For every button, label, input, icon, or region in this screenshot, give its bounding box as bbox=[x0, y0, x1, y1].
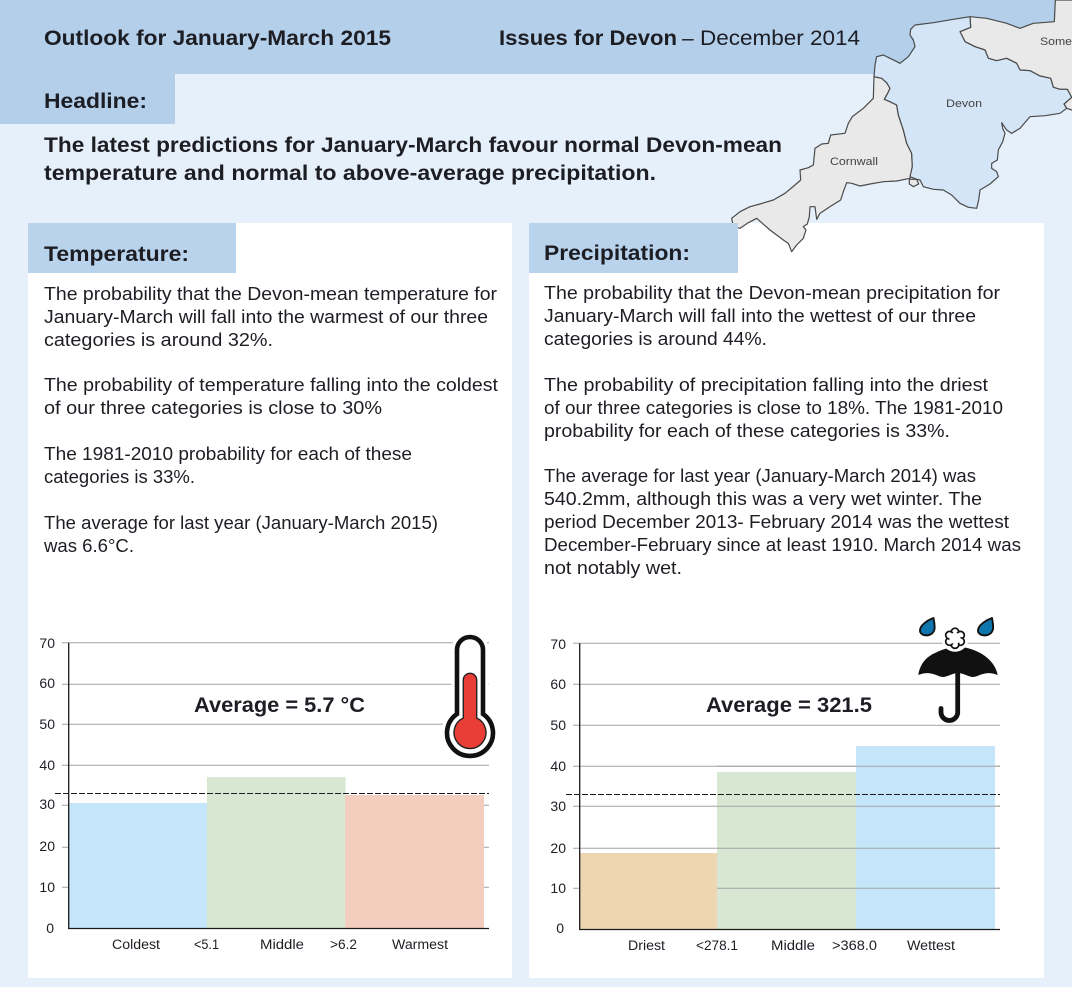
bar: warmest bbox=[345, 795, 484, 928]
temperature text block: The average for last year (January-March 2015) bbox=[44, 513, 438, 533]
title: issues for Devon: – bbox=[682, 27, 694, 50]
title: issues for Devon: December 2014 bbox=[700, 27, 860, 50]
temperature text block: January-March will fall into the warmest of our three bbox=[44, 307, 488, 327]
map: Somerset bbox=[960, 0, 1072, 113]
headline tab bbox=[0, 74, 175, 124]
map of Devon and neighbouring counties bbox=[732, 0, 1072, 252]
category labels: Middle bbox=[771, 938, 815, 953]
panel: temperature background bbox=[28, 223, 512, 978]
title: outlook: Outlook for January-March 2015 bbox=[44, 27, 391, 50]
axis labels: 30 bbox=[550, 798, 566, 814]
category labels: Middle bbox=[260, 937, 304, 952]
precipitation text block: 540.2mm, although this was a very wet winter. The bbox=[544, 489, 982, 509]
raindrop right bbox=[978, 618, 993, 635]
precipitation text block: The average for last year (January-March 2014) was bbox=[544, 466, 976, 486]
icon: umbrella with rain and snow bbox=[918, 618, 998, 720]
bar: middle bbox=[717, 772, 856, 929]
axis labels: 20 bbox=[39, 838, 55, 854]
map: Devon bbox=[874, 17, 1072, 208]
temperature text block: The probability that the Devon-mean temperature for bbox=[44, 284, 497, 304]
axis labels: 60 bbox=[39, 675, 55, 691]
precipitation text block bbox=[544, 283, 1021, 578]
axis labels: 20 bbox=[550, 840, 566, 856]
map labels: Devon bbox=[946, 98, 982, 110]
precipitation text block: not notably wet. bbox=[544, 558, 682, 578]
umbrella canopy bbox=[918, 647, 998, 677]
chart note: average: Average = 5.7 °C bbox=[194, 694, 365, 717]
precipitation text block: December-February since at least 1910. March 2014 was bbox=[544, 535, 1021, 555]
headline tab: Headline: bbox=[44, 90, 147, 113]
axis labels: 60 bbox=[550, 676, 566, 692]
category labels: Wettest bbox=[907, 938, 955, 953]
map labels: Cornwall bbox=[830, 156, 878, 168]
axis labels: 70 bbox=[550, 636, 566, 652]
category labels bbox=[112, 937, 448, 952]
raindrop left bbox=[920, 618, 935, 635]
bar: wettest bbox=[856, 746, 995, 929]
axis labels: 10 bbox=[550, 880, 566, 896]
precipitation text block: The probability of precipitation falling into the driest bbox=[544, 375, 988, 395]
temperature text block: of our three categories is close to 30% bbox=[44, 398, 382, 418]
title: issues for Devon: Issues for Devon bbox=[499, 27, 677, 50]
temperature text block bbox=[43, 284, 498, 556]
axis labels: 10 bbox=[39, 879, 55, 895]
heading: precipitation bbox=[529, 223, 738, 273]
axis labels: 30 bbox=[39, 796, 55, 812]
axis labels: 50 bbox=[39, 716, 55, 732]
precipitation text block: January-March will fall into the wettest of our three bbox=[544, 306, 976, 326]
bar chart: temperature bbox=[39, 635, 489, 952]
category labels: Warmest bbox=[392, 937, 448, 952]
precipitation text block: period December 2013- February 2014 was the wettest bbox=[544, 512, 1009, 532]
bar: driest bbox=[580, 853, 717, 929]
axis labels: 0 bbox=[46, 920, 54, 936]
category labels: Coldest bbox=[112, 937, 160, 952]
temperature text block: The 1981-2010 probability for each of these bbox=[44, 444, 412, 464]
category labels: Driest bbox=[628, 938, 665, 953]
heading: temperature: Temperature: bbox=[44, 243, 189, 266]
axis labels: 40 bbox=[550, 758, 566, 774]
headline text: The latest predictions for January-March favour normal Devon-mean bbox=[44, 134, 782, 157]
axis labels: 70 bbox=[39, 635, 55, 651]
headline text: temperature and normal to above-average precipitation. bbox=[44, 162, 656, 185]
map labels: Some bbox=[1040, 36, 1072, 48]
panel: precipitation background bbox=[529, 223, 1044, 978]
temperature text block: The probability of temperature falling into the coldest bbox=[44, 375, 498, 395]
bar: coldest bbox=[69, 803, 207, 928]
map labels bbox=[830, 36, 1072, 168]
precipitation text block: probability for each of these categories is 33%. bbox=[544, 421, 950, 441]
bar: middle bbox=[207, 777, 346, 928]
headline text bbox=[44, 134, 782, 185]
category labels: <5.1 bbox=[194, 937, 219, 952]
category labels bbox=[628, 938, 955, 953]
bar chart: precipitation bbox=[550, 636, 1000, 953]
precipitation text block: The probability that the Devon-mean precipitation for bbox=[544, 283, 1000, 303]
axis labels: 50 bbox=[550, 717, 566, 733]
temperature text block: categories is 33%. bbox=[44, 467, 195, 487]
axis labels bbox=[550, 636, 566, 936]
temperature text block: categories is around 32%. bbox=[44, 330, 273, 350]
temperature text block: was 6.6°C. bbox=[43, 536, 134, 556]
category labels: <278.1 bbox=[696, 938, 738, 953]
precipitation text block: categories is around 44%. bbox=[544, 329, 767, 349]
category labels: >6.2 bbox=[330, 937, 357, 952]
umbrella handle bbox=[941, 672, 958, 720]
category labels: >368.0 bbox=[832, 938, 877, 953]
axis labels: 40 bbox=[39, 757, 55, 773]
heading: precipitation: Precipitation: bbox=[544, 242, 690, 265]
axis labels: 0 bbox=[556, 920, 564, 936]
heading: temperature bbox=[28, 223, 236, 273]
chart note: average: Average = 321.5 bbox=[706, 694, 872, 717]
precipitation text block: of our three categories is close to 18%. The 1981-2010 bbox=[544, 398, 1003, 418]
snowflake bbox=[942, 625, 968, 652]
header bar bbox=[0, 0, 1060, 74]
map: estuary bbox=[909, 179, 919, 187]
icon: thermometer bbox=[447, 637, 493, 756]
map: Cornwall bbox=[732, 77, 912, 252]
axis labels bbox=[39, 635, 55, 936]
